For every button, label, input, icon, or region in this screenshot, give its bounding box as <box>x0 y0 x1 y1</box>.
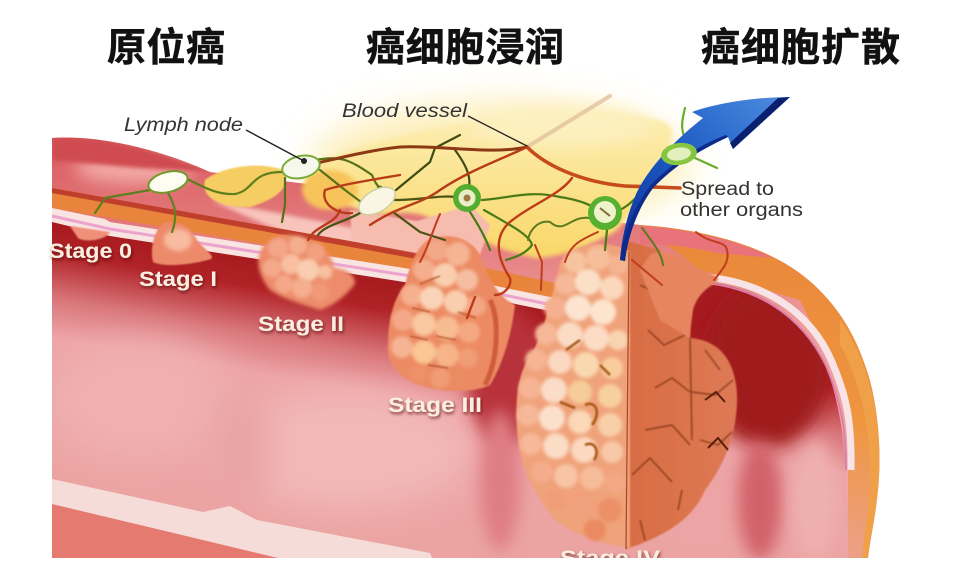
lymph node: green cancerous <box>453 184 481 212</box>
tumor: stage IV <box>516 240 737 549</box>
label: Spread to other organs: other organs <box>680 200 803 221</box>
tumor spread on far wall <box>640 252 718 338</box>
lymph node: distant, over arrow <box>660 141 698 167</box>
tumor: stage II <box>258 235 355 310</box>
lymph node: upper white <box>280 152 322 182</box>
title: 原位癌: 原位癌 <box>107 27 225 70</box>
label: Blood vessel with leader <box>342 101 527 146</box>
lumen interior <box>45 215 852 560</box>
yellow fat tissue <box>204 105 672 258</box>
lymph node: middle white <box>354 181 400 221</box>
lymph node: green cancerous right <box>588 196 622 230</box>
tumor: stage 0 <box>70 226 110 240</box>
colon outer wall <box>52 130 892 560</box>
label: Lymph node with leader: Lymph node <box>124 115 243 136</box>
right wall bands <box>640 225 879 558</box>
title: 癌细胞扩散: 癌细胞扩散 <box>701 27 900 70</box>
fat glow halo <box>310 103 690 227</box>
tumor: stage I <box>152 222 212 265</box>
bottom white cover <box>0 558 968 571</box>
spread arrow <box>620 97 790 261</box>
label: Lymph node with leader <box>124 115 307 164</box>
lower lumen fold <box>52 503 278 558</box>
label: Stage III: Stage III <box>388 394 482 417</box>
tumor: stage III <box>388 236 515 391</box>
label: Stage I: Stage I <box>139 268 217 291</box>
label: Blood vessel with leader: Blood vessel <box>342 101 468 122</box>
label: Stage 0: Stage 0 <box>49 240 132 263</box>
right mucosa band <box>690 276 851 470</box>
label: Spread to other organs <box>680 179 803 221</box>
illustration: colon cross-section <box>45 103 892 560</box>
lymph vessels <box>95 108 717 265</box>
label: Stage IV, clipped: Stage IV <box>560 547 660 570</box>
lymph node: left white <box>146 167 190 197</box>
title: 癌细胞浸润: 癌细胞浸润 <box>366 27 564 70</box>
orange muscle band <box>52 188 555 300</box>
blood vessels <box>308 96 728 318</box>
cut surface <box>625 240 737 549</box>
label: Stage II: Stage II <box>258 313 344 336</box>
white mucosa band <box>52 208 555 311</box>
label: Spread to other organs: Spread to <box>681 179 774 200</box>
bumpy outer surface <box>516 244 630 548</box>
cut divider line <box>626 252 629 549</box>
